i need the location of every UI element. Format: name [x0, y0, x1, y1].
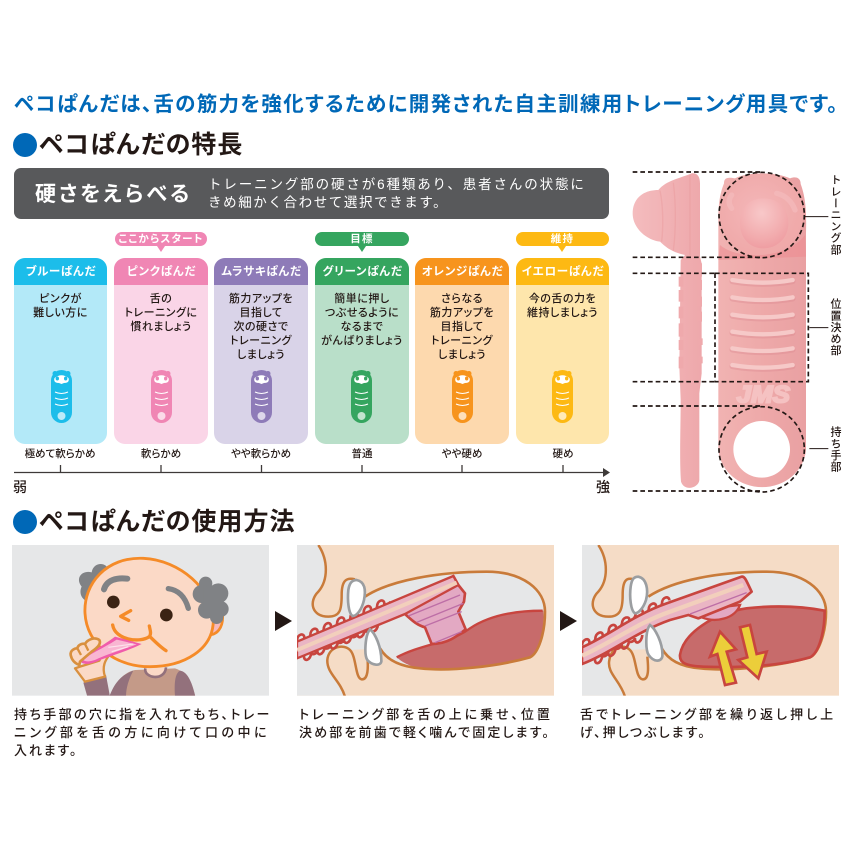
hardness labels: やや硬め — [442, 448, 482, 460]
arrow: up — [710, 632, 736, 685]
card: orange: 筋力アップを — [430, 307, 494, 319]
teeth — [348, 580, 365, 616]
card: green: 簡単に押し — [334, 293, 390, 305]
text: step 3 — [580, 707, 836, 740]
title: ペコぱんだは、舌の筋力を強化するために開発された自主訓練用トレーニング用具です。 — [14, 93, 839, 116]
hardness labels: 普通 — [352, 448, 372, 460]
front view — [718, 173, 806, 487]
card: purple: 筋力アップを — [229, 293, 293, 305]
text: step 2 — [299, 707, 553, 740]
mouth cavity — [648, 573, 824, 664]
card: orange: オレンジぱんだ — [422, 266, 503, 278]
eyebrows — [104, 578, 127, 589]
card: blue: ピンクが — [39, 293, 82, 305]
mouth cavity — [366, 573, 544, 666]
dashed guides — [633, 172, 808, 492]
card: pink: トレーニングに — [124, 307, 197, 319]
palm — [75, 653, 111, 682]
card: pink: ピンクぱんだ — [127, 266, 196, 278]
product photo — [632, 171, 828, 493]
tongue — [397, 611, 544, 669]
banner text — [208, 177, 586, 210]
device head — [405, 576, 466, 644]
card: orange: トレーニング — [431, 335, 493, 347]
card: purple: しましょう — [237, 349, 285, 361]
banner text: きめ細かく合わせて選択できます。 — [208, 195, 448, 210]
card: yellow — [516, 258, 609, 444]
text: step 1: 入れます。 — [14, 743, 78, 758]
heading: features: ペコぱんだの特長 — [39, 131, 243, 159]
tag: goal: 目標 — [350, 233, 374, 245]
tongue — [680, 607, 825, 667]
card: pink: 舌の — [150, 293, 172, 305]
hardness labels — [24, 448, 573, 460]
banner text: トレーニング部の硬さが6種類あり、患者さんの状態に — [208, 177, 586, 192]
card: orange — [415, 258, 509, 444]
text: step 2: トレーニング部を舌の上に乗せ、位置 — [299, 707, 553, 722]
banner: selectable hardness — [14, 168, 609, 219]
card: blue: ブルーぱんだ — [26, 266, 96, 278]
face outside — [582, 545, 648, 696]
arrow: step 2 to 3 — [560, 611, 577, 631]
axis label: strong: 強 — [596, 479, 610, 495]
teeth — [630, 577, 647, 613]
card: orange: 目指して — [440, 321, 484, 333]
tag: start here — [115, 232, 207, 252]
card: yellow: イエローぱんだ — [522, 266, 604, 278]
ear — [208, 615, 223, 635]
card: purple: 目指して — [239, 307, 283, 319]
illustration: device on tongue — [297, 545, 554, 696]
banner heading: 硬さをえらべる — [35, 183, 192, 206]
label: positioning part: 位置決め部 — [829, 298, 841, 356]
device — [80, 637, 142, 664]
card: yellow: 今の舌の力を — [529, 293, 596, 305]
hardness labels: 極めて軟らかめ — [25, 448, 95, 460]
arrow: step 1 to 2 — [275, 611, 292, 631]
stem bumps — [582, 597, 669, 645]
stem bumps — [297, 600, 390, 641]
tag: maintain: 維持 — [551, 233, 574, 245]
hair left — [78, 564, 106, 600]
card: purple: ムラサキぱんだ — [221, 266, 302, 278]
hardness labels: 軟らかめ — [141, 448, 181, 460]
text: step 1: ニング部を舌の方に向けて口の中に — [14, 725, 270, 740]
tag: goal — [315, 232, 409, 252]
text: step 3: げ、押しつぶします。 — [580, 725, 707, 740]
card: purple: 次の硬さで — [233, 321, 289, 333]
text: step 3: 舌でトレーニング部を繰り返し押し上 — [580, 707, 836, 722]
text: step 2: 決め部を前歯で軽く噛んで固定します。 — [299, 725, 551, 740]
card: blue — [14, 258, 107, 444]
hardness labels: やや軟らかめ — [231, 448, 291, 460]
leader lines — [805, 217, 828, 449]
device stem — [582, 577, 752, 664]
text: step 1: 持ち手部の穴に指を入れてもち、トレー — [14, 707, 272, 722]
hardness labels: 硬め — [553, 448, 573, 460]
axis label: weak: 弱 — [13, 479, 27, 495]
card: blue: 難しい方に — [33, 307, 88, 319]
label: handle part: 持ち手部 — [829, 426, 841, 472]
card: green: グリーンぱんだ — [322, 266, 402, 278]
card: green: つぶせるように — [325, 307, 399, 319]
card: yellow: 維持しましょう — [527, 307, 598, 319]
face outside — [297, 545, 364, 696]
eyes — [107, 596, 120, 608]
illustration: patient inserting device — [12, 545, 269, 696]
face — [85, 558, 213, 667]
card: green: がんばりましょう — [321, 335, 403, 347]
card: green: なるまで — [341, 321, 383, 333]
tag: start here: ここからスタート — [118, 233, 204, 245]
card: purple — [214, 258, 308, 444]
JMS logo: JMS — [737, 381, 790, 408]
card: pink — [114, 258, 208, 444]
text: step 1 — [14, 707, 272, 758]
sleeve — [83, 675, 110, 697]
ribs — [732, 280, 793, 369]
nose and mouth — [121, 611, 131, 620]
card: orange: しましょう — [438, 349, 486, 361]
card: purple: トレーニング — [230, 335, 292, 347]
label: training part: トレーニング部 — [829, 174, 841, 255]
card: pink: 慣れましょう — [130, 321, 192, 333]
heading: usage: ペコぱんだの使用方法 — [39, 508, 296, 536]
card: orange: さらなる — [441, 293, 483, 305]
card: green — [315, 258, 409, 444]
illustration: pressing device with tongue — [582, 545, 839, 696]
tag: maintain — [516, 232, 609, 252]
side view — [633, 173, 703, 488]
fingers — [71, 639, 100, 665]
arrow: down — [738, 625, 767, 678]
device under head — [702, 605, 740, 620]
device stem — [297, 576, 458, 658]
hair right — [193, 577, 229, 624]
shirt — [109, 667, 195, 697]
axis arrow — [14, 465, 610, 477]
